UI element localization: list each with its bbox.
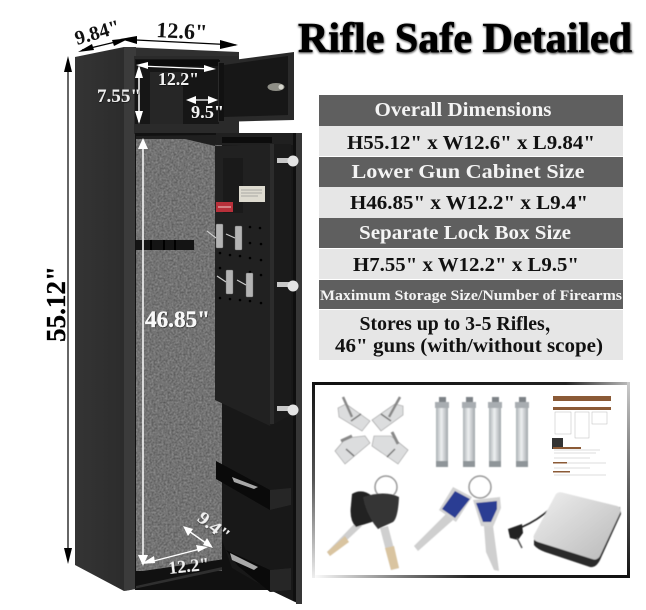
- lower door: [207, 133, 302, 604]
- power bank: [508, 492, 621, 567]
- row: overall dimensions value: [319, 126, 623, 156]
- dimension labels: 9.4": [194, 507, 234, 545]
- expansion bolts: [435, 397, 529, 467]
- row: storage heading: [319, 280, 623, 309]
- dimension labels: 12.6": [156, 17, 208, 45]
- row: overall dimensions heading: [319, 95, 623, 126]
- outside dimension arrows: [64, 36, 238, 564]
- accessories panel: [312, 382, 630, 578]
- white interior arrows: [135, 62, 218, 566]
- dimension labels: 9.5": [191, 102, 224, 122]
- lower gun cabinet carpet: [135, 133, 232, 590]
- door lock: [268, 83, 284, 91]
- dimension labels: 12.2": [158, 69, 199, 89]
- locking bolts: [277, 156, 298, 416]
- safe front frame: [124, 47, 136, 591]
- row: lower cabinet heading: Lower Gun Cabinet Size: [352, 161, 585, 183]
- row: overall dimensions heading: Overall Dimensions: [374, 99, 552, 121]
- butt rest lower: [226, 550, 291, 592]
- door organizer panel: [215, 144, 270, 426]
- barrel rest: [136, 240, 194, 250]
- wall hooks: [335, 397, 408, 464]
- safe top edge: [124, 47, 239, 58]
- row: overall dimensions value: H55.12" x W12.6" x L9.84": [347, 132, 595, 154]
- manual sticker: [239, 186, 265, 202]
- dimension labels: 9.84": [72, 16, 123, 50]
- row: lock box value: [319, 249, 623, 279]
- dimension labels: [41, 16, 234, 578]
- row: lower cabinet value: H46.85" x W12.2" x L9.4": [350, 192, 588, 214]
- row: storage value: 46" guns (with/without scope): [335, 335, 603, 357]
- instruction manual: [552, 396, 611, 476]
- upper door: [218, 52, 294, 122]
- title: Rifle Safe Detailed: [298, 16, 632, 62]
- row: storage heading: Maximum Storage Size/Number of Firearms: [320, 288, 622, 304]
- title: Rifle Safe Detailed: [298, 17, 633, 63]
- dimension labels: 12.2": [167, 554, 210, 578]
- row: lock box heading: Separate Lock Box Size: [359, 222, 571, 244]
- upper lock box interior: [134, 59, 238, 134]
- butt rest upper: [216, 461, 291, 510]
- door outer edge: [296, 133, 302, 604]
- dimension labels: 7.55": [97, 86, 141, 107]
- blue keys: [414, 476, 501, 571]
- pegboard holes: [219, 226, 262, 304]
- row: storage value: Stores up to 3-5 Rifles，: [360, 313, 564, 335]
- row: lock box value: H7.55" x W12.2" x L9.5": [353, 254, 579, 276]
- row: storage value: [319, 310, 623, 360]
- dimension labels: 46.85": [145, 307, 210, 332]
- row: lower cabinet heading: [319, 157, 623, 187]
- row: lower cabinet value: [319, 187, 623, 218]
- safe illustration: [41, 16, 302, 604]
- row: lock box heading: [319, 218, 623, 248]
- cabinet floor: [136, 558, 232, 588]
- specification table: [319, 95, 623, 360]
- door hooks: [216, 224, 253, 297]
- dimension labels: 55.12": [41, 266, 71, 342]
- black keys: [327, 476, 399, 570]
- warning sticker: [216, 202, 233, 212]
- panel frame: [312, 382, 630, 578]
- safe side panel: [75, 47, 124, 591]
